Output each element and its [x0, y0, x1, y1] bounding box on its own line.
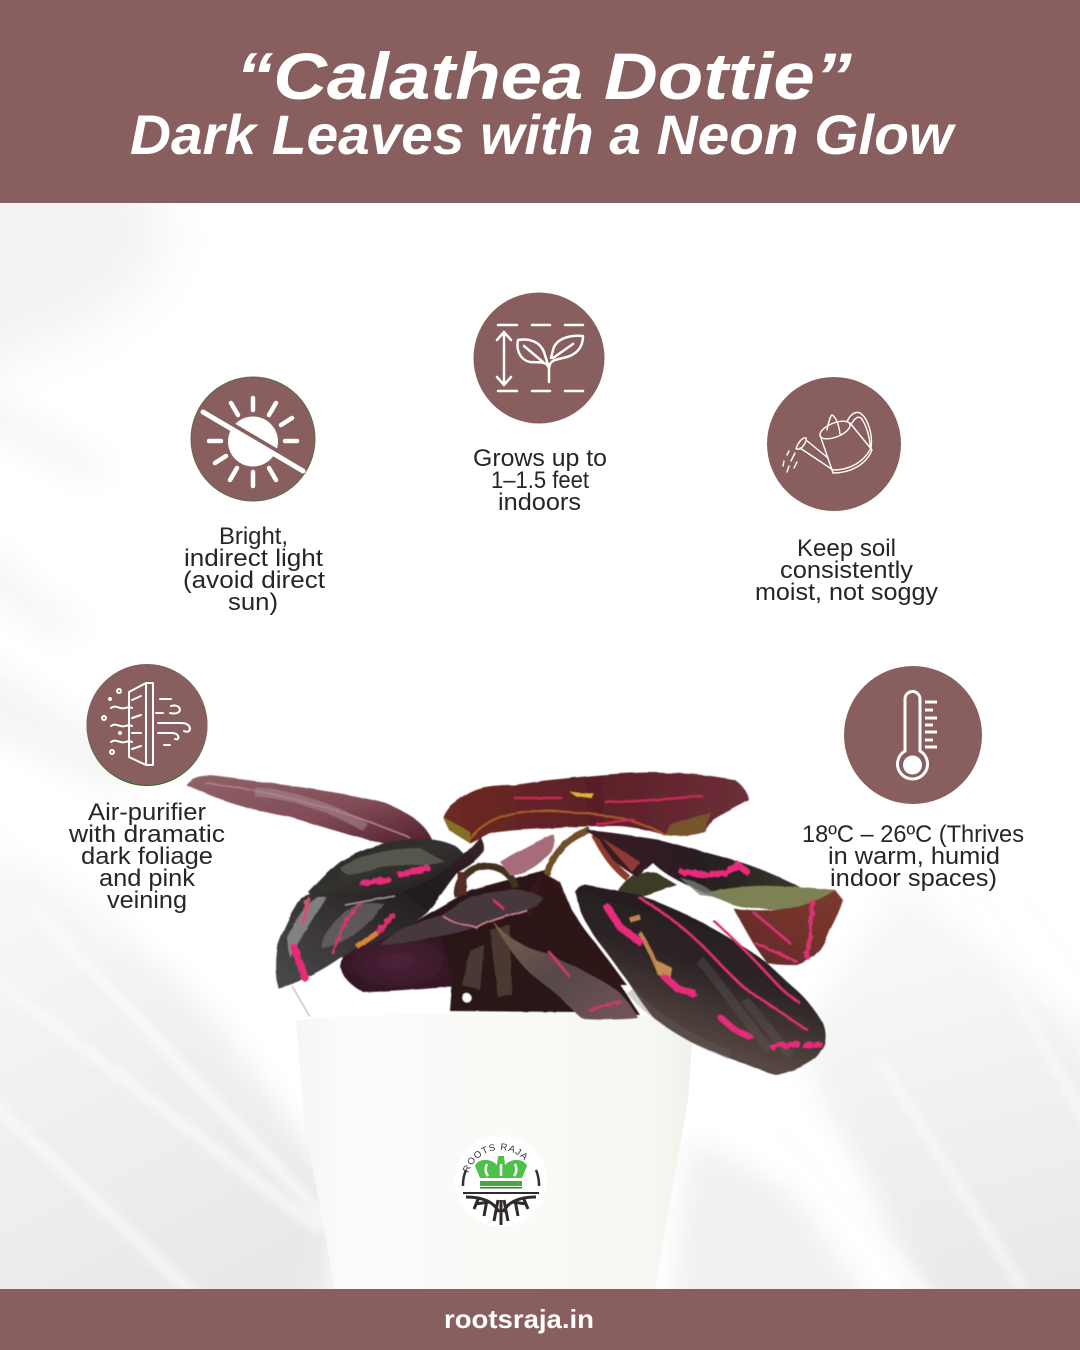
footer website text: rootsraja.in — [444, 1304, 594, 1334]
leaf: upper left dark — [308, 839, 466, 902]
text: light: sun) — [228, 589, 278, 616]
white pot — [296, 1013, 694, 1289]
text: air purifier — [68, 799, 225, 914]
text: air purifier: and pink — [99, 865, 196, 892]
title: “Calathea Dottie” — [236, 39, 852, 113]
text: water — [755, 535, 938, 606]
text: temperature: indoor spaces) — [830, 865, 997, 892]
title: Dark Leaves with a Neon Glow — [130, 103, 956, 166]
text: light: indirect light — [184, 545, 323, 572]
leaf: back green — [617, 872, 677, 897]
text: water: Keep soil — [797, 535, 896, 562]
text: air purifier: dark foliage — [81, 843, 213, 870]
text: air purifier: veining — [107, 887, 187, 914]
leaf: upper left mauve — [186, 776, 433, 848]
text: air purifier: Air-purifier — [88, 799, 206, 826]
leaf: top centre maroon — [443, 772, 749, 843]
small pink leaf — [500, 834, 554, 875]
footer band — [0, 1289, 1080, 1350]
text: temperature: 18ºC – 26ºC (Thrives — [802, 821, 1024, 848]
pink leaf veins — [294, 864, 820, 1047]
leaf: lower centre grey-brown — [492, 920, 638, 1020]
text: height: 1–1.5 feet — [491, 467, 589, 494]
text: air purifier: with dramatic — [68, 821, 225, 848]
text: height: Grows up to — [473, 445, 607, 472]
text: water: moist, not soggy — [755, 579, 938, 606]
leaf: red right — [733, 890, 843, 965]
text: temperature — [802, 821, 1024, 892]
text: height — [473, 445, 607, 516]
text: height: indoors — [498, 489, 581, 516]
icon: watering can — [767, 377, 901, 511]
dark centre and stems — [292, 830, 640, 1017]
text: water: consistently — [780, 557, 913, 584]
leaf: lower left dark — [276, 837, 484, 988]
header band — [0, 0, 1080, 203]
pot logo sticker — [462, 1135, 547, 1227]
icon: no direct sun — [191, 377, 315, 501]
leaf: large right front — [575, 885, 826, 1075]
plant foliage — [186, 772, 843, 1075]
text: temperature: in warm, humid — [828, 843, 1000, 870]
pot logo sticker: ROOTS RAJA — [462, 1143, 527, 1172]
icon: plant height — [474, 292, 604, 424]
text: light: (avoid direct — [183, 567, 325, 594]
purple lower leaf — [340, 932, 455, 992]
title — [130, 39, 956, 166]
text: light: Bright, — [219, 523, 288, 550]
icon: air purifier — [86, 664, 208, 786]
text: light — [183, 523, 325, 616]
leaf: dark maroon rear right — [530, 873, 627, 985]
icon: thermometer — [844, 666, 982, 804]
leaf: right dark with green tip — [585, 830, 835, 910]
leaf: centre with pink edge — [380, 890, 543, 945]
